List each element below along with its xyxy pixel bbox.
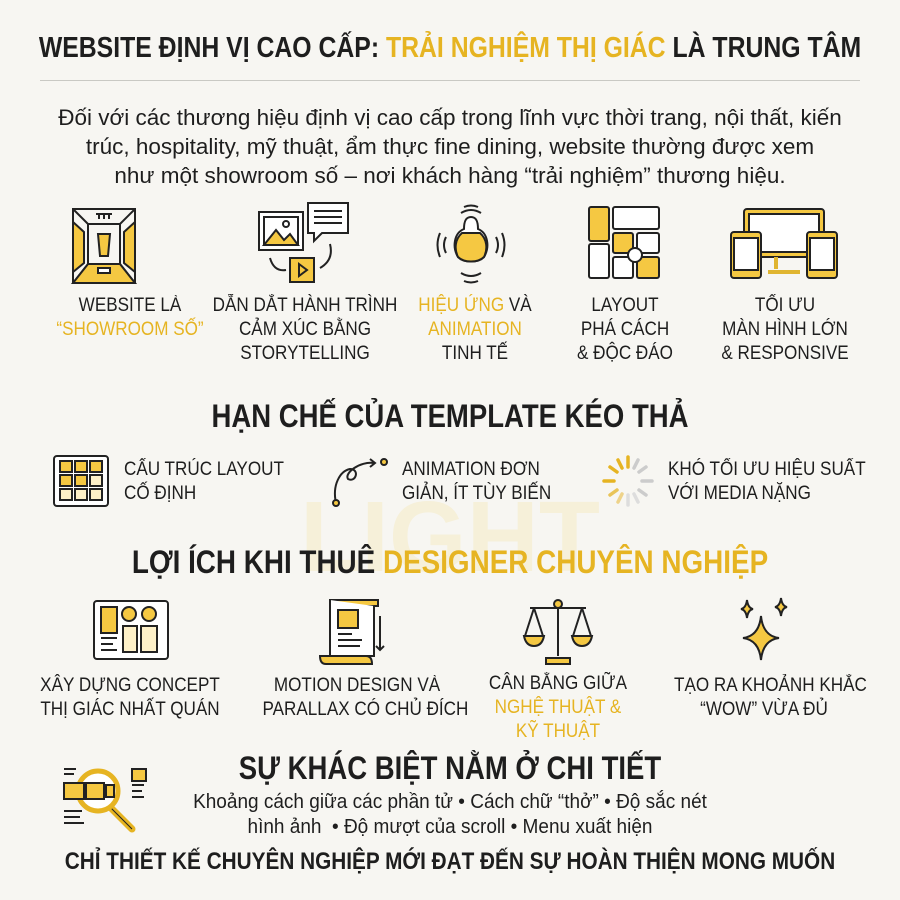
label: animation [418,294,532,364]
label: responsive: TỐI ƯU [755,295,815,316]
label: showroom [56,295,204,340]
label: storytelling [213,294,397,364]
label: wow: TẠO RA KHOẢNH KHẮC [674,675,867,696]
label: balance [489,672,627,742]
text: detail list: Khoảng cách giữa các phần tử • Cách chữ “thở” • Độ sắc nét [193,791,707,813]
icon: balance scale [522,599,594,665]
text: fixed layout [124,458,284,504]
intro paragraph [58,105,842,188]
label: responsive [721,294,849,364]
label: concept: THỊ GIÁC NHẤT QUÁN [40,699,220,720]
icon: scroll [319,599,385,665]
icon: loading spinner [602,455,654,507]
text: media performance: VỚI MEDIA NẶNG [668,483,811,504]
text: detail list: hình ảnh • Độ mượt của scroll • Menu xuất hiện [248,816,652,838]
watermark: LIGHT [300,481,600,593]
heading: details: SỰ KHÁC BIỆT NẰM Ở CHI TIẾT [239,750,661,786]
text: fixed layout: CẤU TRÚC LAYOUT [124,459,284,480]
label: motion: MOTION DESIGN VÀ [274,675,440,696]
label: animation: TINH TẾ [442,343,508,364]
text: simple animation [402,459,551,504]
heading: benefits: LỢI ÍCH KHI THUÊ DESIGNER CHUYÊN NGHIỆP [132,544,768,580]
text: media performance: KHÓ TỐI ƯU HIỆU SUẤT [668,459,866,480]
label: layout [577,295,673,364]
label: wow [674,674,867,720]
label: balance: CÂN BẰNG GIỮA [489,673,627,694]
label: animation: HIỆU ỨNG VÀ [418,295,532,316]
text: media performance [668,458,866,504]
heading: template limits: HẠN CHẾ CỦA TEMPLATE KÉO THẢ [211,398,689,434]
intro paragraph: trúc, hospitality, mỹ thuật, ẩm thực fine dining, website thường được xem [86,134,814,159]
title: WEBSITE ĐỊNH VỊ CAO CẤP: TRẢI NGHIỆM THỊ GIÁC LÀ TRUNG TÂM [39,32,861,64]
label: showroom: “SHOWROOM SỐ” [56,319,204,340]
text: detail list [193,790,707,838]
intro paragraph: Đối với các thương hiệu định vị cao cấp trong lĩnh vực thời trang, nội thất, kiến [58,105,842,130]
label: balance: KỸ THUẬT [516,721,600,742]
label: layout: PHÁ CÁCH [581,319,669,340]
label: balance: NGHỆ THUẬT & [495,697,621,718]
label: showroom: WEBSITE LÀ [79,295,181,316]
icon: storytelling [258,202,349,283]
label: storytelling: DẪN DẮT HÀNH TRÌNH [213,295,397,316]
icon: grid [53,455,109,507]
icon: showroom [71,208,137,284]
icon: sparkles [740,598,788,660]
label: storytelling: CẢM XÚC BẰNG [239,319,371,340]
icon: concept board [93,600,169,660]
label: wow: “WOW” VỪA ĐỦ [700,699,828,720]
icon: animation [436,204,506,284]
label: concept: XÂY DỰNG CONCEPT [40,675,220,696]
text: simple animation: GIẢN, ÍT TÙY BIẾN [402,483,551,504]
icon: magnifier [63,768,147,832]
label: layout: LAYOUT [591,295,659,316]
label: responsive: MÀN HÌNH LỚN [722,319,848,340]
text: fixed layout: CỐ ĐỊNH [124,483,196,504]
label: motion: PARALLAX CÓ CHỦ ĐÍCH [262,699,468,720]
icon: layout [588,206,660,279]
icon: curve arrow [332,458,388,507]
label: storytelling: STORYTELLING [240,343,370,364]
label: motion [262,675,468,720]
label: responsive: & RESPONSIVE [721,343,849,364]
label: concept [40,674,220,720]
icon: responsive [730,208,838,279]
text: simple animation: ANIMATION ĐƠN [402,459,540,480]
label: animation: ANIMATION [428,319,522,340]
intro paragraph: như một showroom số – nơi khách hàng “trải nghiệm” thương hiệu. [114,163,786,188]
label: layout: & ĐỘC ĐÁO [577,343,673,364]
conclusion: CHỈ THIẾT KẾ CHUYÊN NGHIỆP MỚI ĐẠT ĐẾN SỰ HOÀN THIỆN MONG MUỐN [65,848,835,875]
